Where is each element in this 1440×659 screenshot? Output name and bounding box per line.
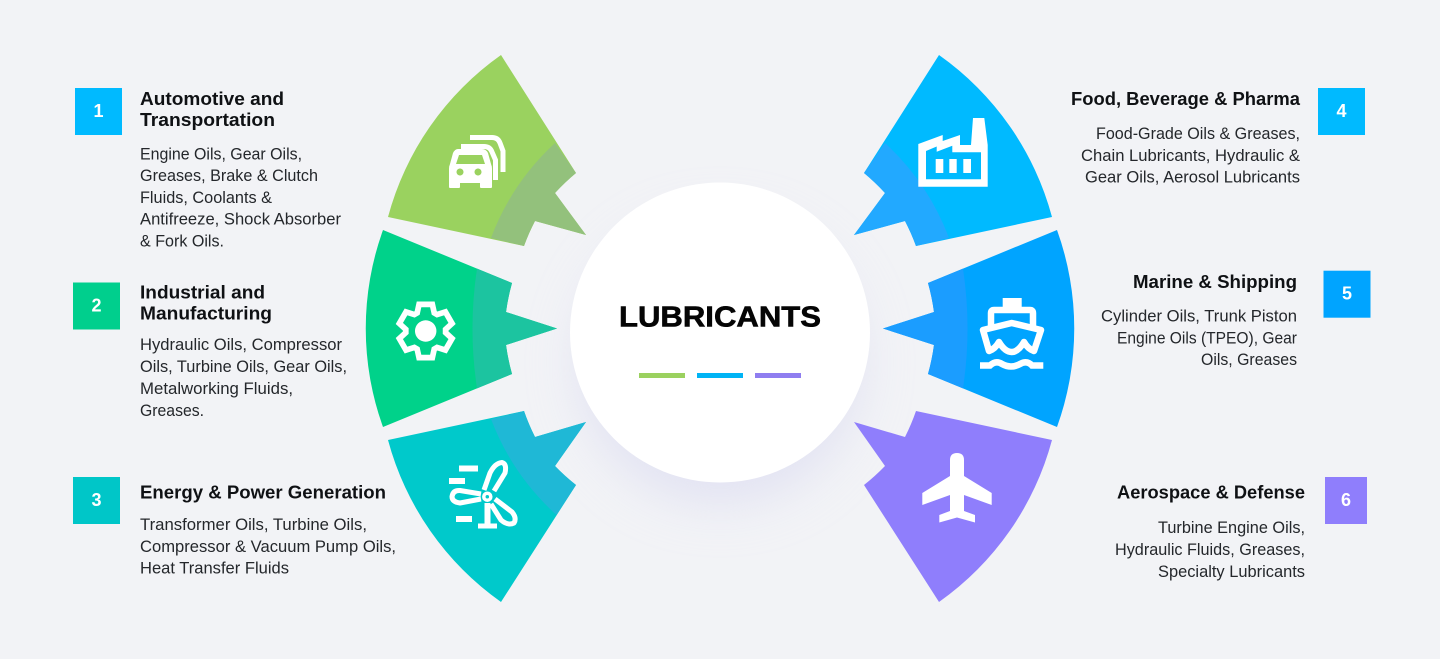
text block 1: Greases, Brake & Clutch bbox=[140, 167, 318, 185]
text block 6: Turbine Engine Oils, bbox=[1158, 519, 1305, 537]
text block 6: Aerospace & Defense bbox=[1117, 483, 1305, 503]
text block 5: Marine & Shipping bbox=[1133, 272, 1297, 292]
text block 4: Food, Beverage & Pharma bbox=[1071, 89, 1301, 109]
text block 5: Engine Oils (TPEO), Gear bbox=[1117, 329, 1297, 347]
text block 4: Gear Oils, Aerosol Lubricants bbox=[1085, 168, 1300, 186]
text block 5: Cylinder Oils, Trunk Piston bbox=[1101, 308, 1297, 326]
segment 2: industrial bbox=[366, 230, 557, 427]
badge 4: 4 bbox=[1336, 101, 1347, 121]
text block 5 bbox=[1101, 272, 1297, 369]
text block 2: Industrial and bbox=[140, 282, 265, 302]
text block 5: Oils, Greases bbox=[1201, 351, 1297, 369]
icon: cars bbox=[449, 138, 503, 188]
badge 6: 6 bbox=[1341, 490, 1351, 510]
text block 1: Engine Oils, Gear Oils, bbox=[140, 145, 302, 163]
central circle shadow bbox=[580, 222, 860, 502]
badge 2 bbox=[73, 282, 120, 330]
text block 2: Greases. bbox=[140, 402, 204, 420]
text block 6 bbox=[1115, 483, 1305, 581]
badge 3: 3 bbox=[91, 490, 102, 510]
icon: ship bbox=[980, 298, 1043, 366]
text block 1: & Fork Oils. bbox=[140, 232, 224, 250]
badge 6 bbox=[1325, 477, 1367, 524]
text block 4 bbox=[1071, 89, 1301, 186]
badge 4 bbox=[1318, 88, 1365, 135]
text block 6: Specialty Lubricants bbox=[1158, 563, 1305, 581]
text block 2: Metalworking Fluids, bbox=[140, 380, 293, 398]
center title: LUBRICANTS bbox=[619, 302, 821, 334]
badge 2: 2 bbox=[91, 296, 102, 316]
text block 1: Fluids, Coolants & bbox=[140, 189, 272, 207]
text block 6: Hydraulic Fluids, Greases, bbox=[1115, 541, 1305, 559]
badge 1 bbox=[75, 88, 122, 135]
text block 3: Energy & Power Generation bbox=[140, 483, 386, 503]
badge 5 bbox=[1324, 271, 1370, 318]
text block 3: Compressor & Vacuum Pump Oils, bbox=[140, 538, 396, 556]
segment 5: marine bbox=[883, 230, 1074, 427]
text block 2 bbox=[140, 282, 347, 420]
badge 5: 5 bbox=[1342, 284, 1352, 304]
segment 3: energy bbox=[388, 411, 586, 602]
text block 3: Transformer Oils, Turbine Oils, bbox=[140, 516, 367, 534]
segment 4: food bbox=[854, 55, 1052, 246]
text block 2: Hydraulic Oils, Compressor bbox=[140, 336, 343, 354]
badge 1: 1 bbox=[93, 101, 104, 121]
text block 3: Heat Transfer Fluids bbox=[140, 560, 289, 578]
center color bars bbox=[639, 373, 801, 378]
segment 1: automotive bbox=[388, 55, 586, 246]
text block 3 bbox=[140, 483, 396, 578]
text block 1: Automotive and bbox=[140, 89, 284, 109]
icon: gear bbox=[399, 304, 452, 358]
icon: factory bbox=[918, 118, 988, 187]
text block 1 bbox=[140, 89, 341, 250]
segment 6: aerospace bbox=[854, 411, 1052, 602]
text block 1: Antifreeze, Shock Absorber bbox=[140, 211, 341, 229]
central circle bbox=[570, 182, 870, 482]
text block 1: Transportation bbox=[140, 110, 275, 130]
text block 4: Chain Lubricants, Hydraulic & bbox=[1081, 147, 1300, 165]
text block 2: Oils, Turbine Oils, Gear Oils, bbox=[140, 358, 347, 376]
icon: wind turbine bbox=[449, 462, 515, 528]
text block 2: Manufacturing bbox=[140, 304, 272, 324]
badge 3 bbox=[73, 477, 120, 524]
text block 4: Food-Grade Oils & Greases, bbox=[1096, 125, 1300, 143]
icon: airplane bbox=[922, 453, 992, 522]
